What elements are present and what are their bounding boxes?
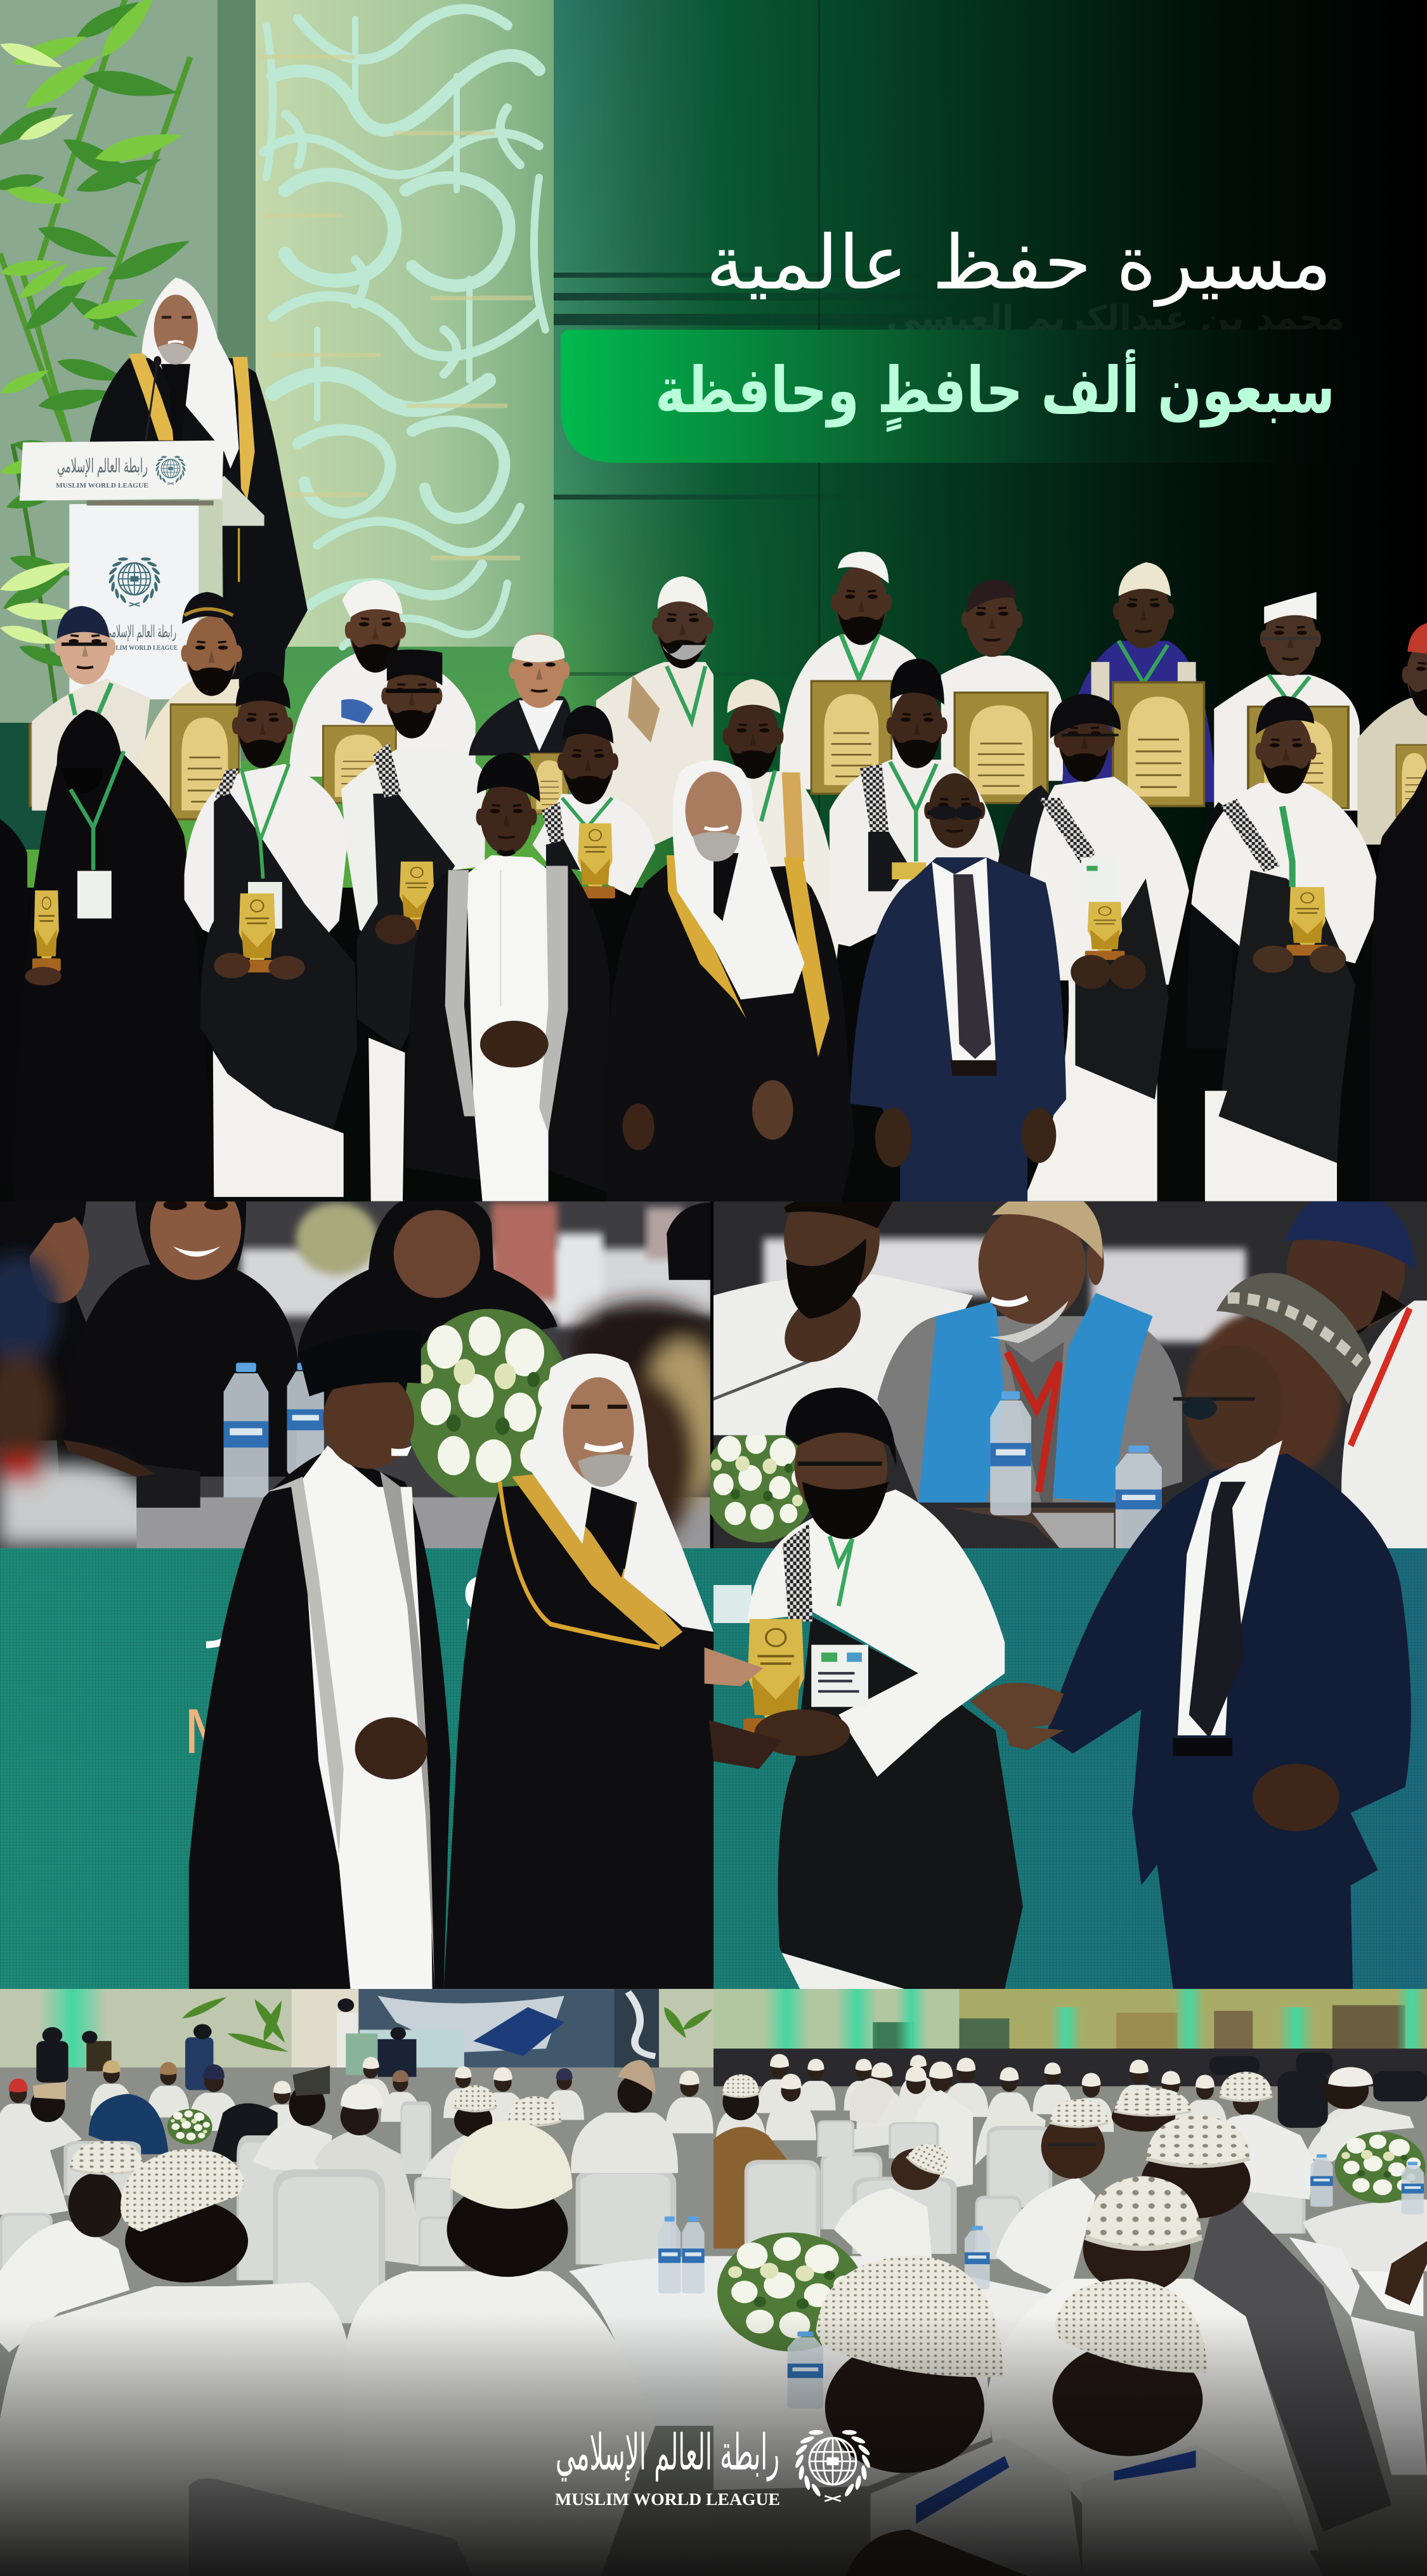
child and white seated men: [834, 2188, 932, 2262]
recipient cap: [785, 1388, 896, 1466]
man with sash and trophy: [185, 671, 357, 1197]
white robed man: [987, 2279, 1319, 2550]
flowers right: [1335, 2132, 1426, 2203]
backdrop letter: M: [184, 1696, 237, 1767]
right: recipient and suit man: [705, 1345, 1411, 1989]
foreground men white thobes: [871, 2437, 1082, 2576]
flowers: [167, 2109, 212, 2144]
man with glasses and trophy: [341, 650, 486, 1201]
elderly man in blue vest: [877, 1316, 1182, 1503]
recipient white thobe: [748, 1489, 1005, 1777]
title: مسيرة حفظ عالمية: [706, 219, 1332, 307]
beard: [158, 344, 192, 365]
face: [563, 1377, 634, 1483]
beard: [578, 1454, 632, 1487]
checkered strap: [783, 1523, 812, 1622]
icon: plant leaves at left: [0, 0, 194, 716]
bottles: [990, 1391, 1031, 1515]
backdrop arabic letter: ر: [206, 1560, 246, 1648]
back row men right: [779, 552, 1427, 845]
table left with flowers: [714, 2256, 1064, 2490]
main figure cloak: [444, 1482, 714, 1989]
chair front right: [1289, 2237, 1427, 2475]
screen: [291, 1989, 659, 2068]
stage people: [36, 1998, 417, 2090]
green title ribbon: [561, 330, 1427, 463]
icon: podium emblem small: [155, 456, 186, 484]
podium logo text: رابطة العالم الإسلامي: [57, 455, 148, 477]
gold trim: [500, 1482, 660, 1647]
white seated man left: [0, 2114, 82, 2215]
suit man head: [1185, 1345, 1284, 1464]
navy suited seated man: [89, 2094, 168, 2154]
center man in silver trimmed robe: [405, 753, 609, 1201]
brown coat man: [714, 2126, 788, 2248]
woman right: [296, 1192, 557, 1425]
mid row man with trophy: [532, 705, 655, 898]
clasped hands: [355, 1718, 427, 1780]
man in navy cap: [1341, 1300, 1427, 1549]
foreground man with patterned cap: [0, 2282, 348, 2576]
headscarf: [526, 1354, 714, 1632]
panel: top stage photo background: [0, 0, 1427, 1201]
name card: [811, 1645, 868, 1707]
shirt: [160, 364, 190, 441]
bottles right: [1310, 2154, 1333, 2207]
chairs: [745, 2120, 1305, 2259]
shirt: [1178, 1440, 1282, 1735]
black shirt: [587, 1482, 637, 1577]
mid row men: [252, 2120, 332, 2173]
young man black cloak: [189, 1451, 450, 1989]
silver trim: [266, 1477, 344, 1854]
bottles: [224, 1362, 268, 1503]
woman far left: [0, 1192, 127, 1440]
photo: seated men (right): [703, 1182, 1427, 1551]
gray coat man: [1194, 2201, 1391, 2532]
front right man with card: [996, 694, 1189, 1201]
logo arabic name: رابطة العالم الإسلامي: [556, 2424, 779, 2482]
logo english name: MUSLIM WORLD LEAGUE: [555, 2490, 780, 2509]
flowers: [703, 1426, 815, 1543]
white seated mid: [909, 2090, 973, 2188]
group photo: right half: [606, 552, 1427, 1205]
backdrop fragment: [714, 1585, 752, 1623]
blurred man with patterned cap: [1187, 1311, 1341, 1487]
smile: [585, 1444, 623, 1449]
award ceremony figures: [189, 1331, 1411, 1989]
table right: [1303, 2199, 1427, 2271]
icon: podium emblem large: [108, 557, 161, 606]
tie: [1189, 1482, 1246, 1738]
gold plaque: [743, 1619, 808, 1737]
microphone: [146, 361, 157, 441]
panel: teal LED backdrop: [0, 1548, 1427, 1989]
blurred foreground: [0, 1254, 205, 1544]
table and bottles: [569, 2256, 714, 2426]
group photo: left half: [0, 576, 714, 1205]
right woman in black: [1369, 768, 1427, 1205]
young man head: [323, 1371, 414, 1469]
photo: conference hall audience: [0, 1984, 1427, 2576]
hands: [755, 1709, 850, 1756]
shelf: [199, 476, 264, 526]
podium body: [69, 504, 199, 699]
hall right half: [714, 1984, 1427, 2576]
distant crowd: [0, 2057, 714, 2138]
text: رابطة العالم الإسلامي: [105, 623, 176, 642]
suit man jacket: [1046, 1453, 1411, 1989]
belt: [1173, 1738, 1232, 1756]
speaker at podium: [20, 278, 308, 699]
suit man hands: [970, 1683, 1064, 1750]
green wall lights: [764, 1984, 1427, 2056]
recipient lower cloak: [778, 1616, 1023, 1989]
left: young man and main figure: [189, 1331, 714, 1989]
tassel: [236, 528, 242, 582]
far rows: [715, 2054, 1385, 2167]
dark crowd: [714, 2049, 1427, 2090]
foreground man with white cap: [344, 2271, 655, 2576]
faint backdrop name: محمد بن عبدالكريم العيسى: [887, 298, 1345, 338]
podium logo english text: MUSLIM WORLD LEAGUE: [56, 482, 148, 489]
mid row men: [722, 659, 1000, 964]
panel: calligraphy backdrop: [256, 0, 554, 647]
bearded man in white: [714, 1274, 973, 1435]
podium top: [20, 441, 224, 501]
foreground chair: [189, 2478, 473, 2576]
facial features: [162, 314, 192, 320]
backdrop numeral: 9: [463, 1557, 506, 1652]
flowers: [405, 1309, 573, 1505]
young man white thobe: [301, 1446, 433, 1989]
gold trims: [129, 353, 176, 441]
wall: [714, 1984, 1427, 2056]
main figure in gold trimmed cloak: [606, 760, 854, 1205]
left foreground man: [0, 2220, 129, 2352]
logo: Muslim World League: [555, 2424, 871, 2509]
icon: globe emblem: [794, 2430, 871, 2501]
dark jacket seated man: [209, 2103, 278, 2162]
podium body english text: MUSLIM WORLD LEAGUE: [103, 645, 178, 652]
lanyard: [830, 1536, 852, 1606]
woman center: [57, 1192, 298, 1477]
bottom fade: [0, 2314, 1427, 2576]
pillar: [199, 500, 223, 698]
suit man: [850, 773, 1066, 1205]
robe: [90, 358, 308, 687]
hall left half: [0, 1984, 715, 2576]
plants: [179, 1994, 715, 2055]
wall: [0, 1984, 714, 2083]
young man cap: [298, 1331, 421, 1396]
floor backdrop: [0, 2068, 714, 2576]
chairs: [0, 2101, 676, 2280]
recipient head: [795, 1412, 887, 1520]
face: [154, 295, 198, 363]
background tables: [714, 1200, 1427, 1551]
headscarf: [141, 278, 239, 469]
back row men left: [30, 576, 714, 845]
black clad woman with trophy: [0, 709, 186, 985]
table background: [0, 1200, 714, 1551]
photo: seated women (left): [0, 1177, 724, 1551]
front right man with trophy: [1187, 696, 1380, 1201]
